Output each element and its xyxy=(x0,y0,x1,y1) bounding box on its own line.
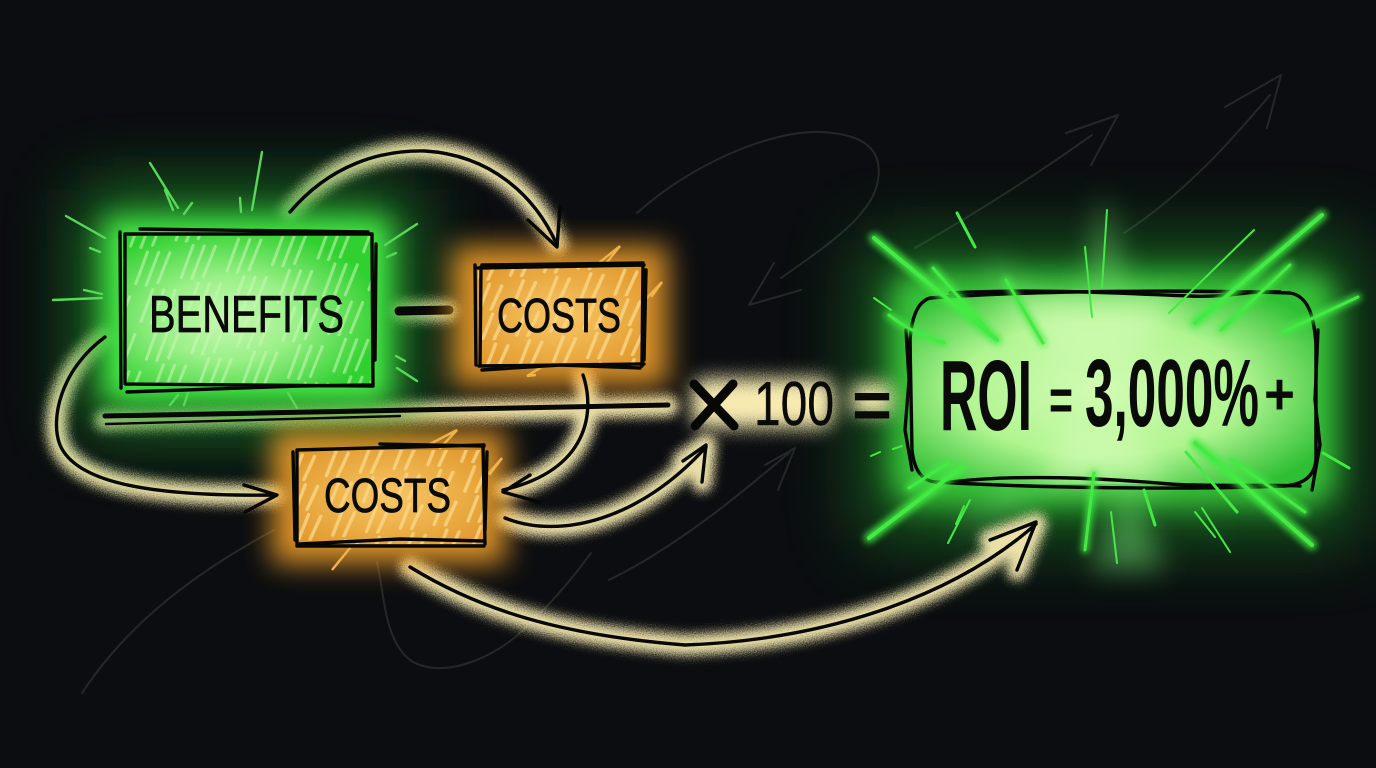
equals sign: = xyxy=(852,367,892,443)
panel: top costs xyxy=(452,246,668,386)
label: COSTS xyxy=(324,470,451,523)
ROI result box xyxy=(905,291,1320,490)
fraction bar xyxy=(105,405,668,424)
ray glow xyxy=(869,215,1358,550)
arrow: bottom costs to ROI xyxy=(410,522,1036,645)
arrow: benefits to top costs xyxy=(290,151,560,247)
label: COSTS xyxy=(497,290,621,343)
label: BENEFITS xyxy=(149,286,344,344)
number 100: 100 xyxy=(754,370,834,439)
benefits box glow xyxy=(53,152,417,430)
connector glows xyxy=(56,151,1036,645)
box outline xyxy=(293,444,487,546)
plus sign: + xyxy=(1264,362,1295,427)
arrow: benefits to bottom costs xyxy=(56,337,277,512)
panel: benefits xyxy=(120,229,376,392)
panel: bottom costs xyxy=(272,430,506,570)
spark lines xyxy=(53,152,417,408)
ray strokes xyxy=(869,210,1358,563)
box outline xyxy=(120,229,376,392)
ROI burst rays xyxy=(869,210,1358,563)
minus sign xyxy=(399,310,449,311)
box outline xyxy=(905,291,1320,490)
box outline xyxy=(475,263,646,370)
faint background arrows xyxy=(82,75,1281,693)
arrow: top costs to bottom costs xyxy=(503,375,588,502)
ROI equation text xyxy=(940,340,1295,452)
ROI label: ROI xyxy=(940,340,1032,452)
multiplier glow xyxy=(692,378,892,428)
equals sign: = xyxy=(1049,368,1073,433)
ROI burst glow xyxy=(860,190,1360,570)
times sign xyxy=(694,384,734,426)
arrow: bottom costs to multiplier xyxy=(505,445,706,526)
multiplier and equals xyxy=(694,367,892,443)
